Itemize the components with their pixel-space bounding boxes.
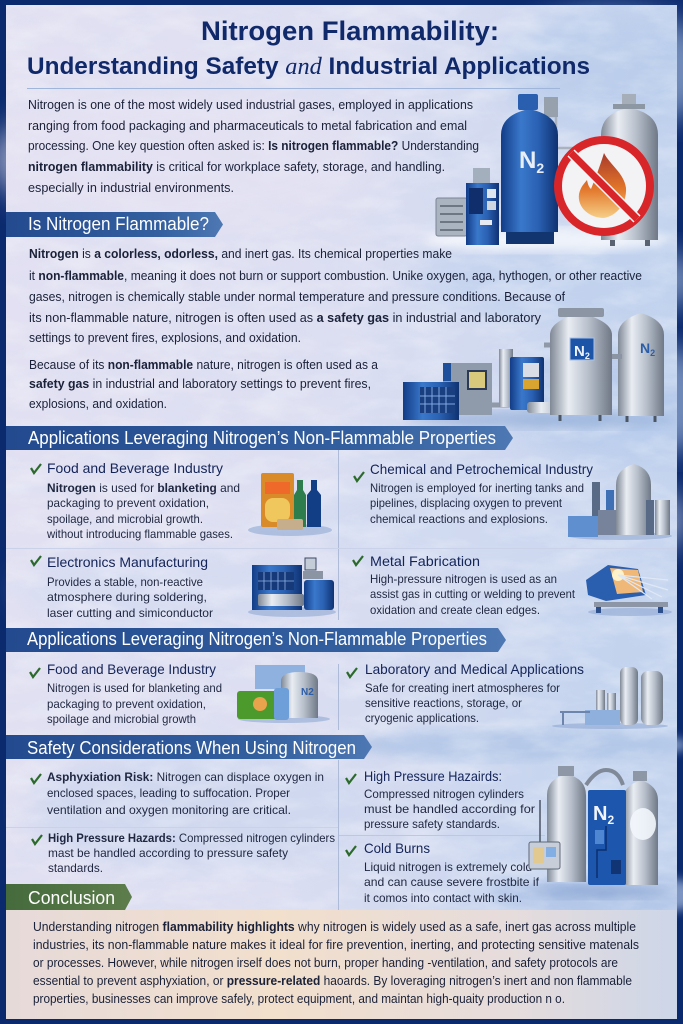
panel: conclusion: or processes. However, while nitrogen irself does not burn, proper handing -ventilation, and safety protocols are <box>33 956 618 970</box>
illustration: nitrogen storage unit <box>529 766 670 899</box>
item: high pressure hazards right: pressure safety standards. <box>364 817 500 831</box>
blue unit <box>510 357 544 410</box>
card: chemical and petrochemical: chemical reactions and explosions. <box>370 512 548 526</box>
panel: second application cards <box>30 661 668 730</box>
blue cabinet: 2 <box>607 813 614 827</box>
text block: flammability explanation: Nitrogen is a colorless, odorless, and inert gas. Its chemical properties make <box>29 247 452 261</box>
panel: conclusion: industries, its non-flammable nature makes it ideal for fire prevention, inerting, and protecting sensitive matenals <box>33 938 639 952</box>
grey cabinet <box>443 363 492 415</box>
intro paragraph <box>28 98 479 195</box>
icon: containers: N2 <box>301 687 314 698</box>
illustration: nitrogen generator plant <box>403 308 675 429</box>
right tank: N <box>640 340 650 356</box>
left tank <box>547 766 586 882</box>
intro paragraph: nitrogen flammability is critical for workplace safety, storage, and handling. <box>28 160 445 174</box>
large tank: N <box>574 343 585 360</box>
card: food and beverage <box>31 460 332 541</box>
item: cold burns: it comos into contact with skin. <box>364 891 522 905</box>
card: laboratory and medical: sensitive reactions, storage, or <box>365 696 522 710</box>
card: chemical and petrochemical: Nitrogen is employed for inerting tanks and <box>370 481 584 495</box>
card: food and beverage two: Food and Beverage Industry <box>47 661 216 677</box>
intro paragraph: processing. One key question often asked is: Is nitrogen flammable? Understanding <box>28 139 479 153</box>
control box <box>529 842 560 869</box>
item: cold burns: and can cause severe frostbite if <box>364 875 540 889</box>
card: food and beverage: Nitrogen is used for blanketing and <box>47 481 240 495</box>
item: high pressure hazards right: must be handled according for <box>364 802 535 816</box>
card: food and beverage two: spoilage and microbial growth <box>47 712 196 726</box>
item: high pressure hazards right: Compressed nitrogen cylinders <box>364 787 524 801</box>
section bar: conclusion: Conclusion <box>28 888 115 908</box>
silver tank <box>601 94 658 246</box>
text block: flammability explanation: it non-flammable, meaning it does not burn or support combustion. Unike oxygen, aga, hythogen, or other reactive <box>29 269 642 283</box>
right tank <box>623 771 658 885</box>
blue cabinet <box>588 790 626 885</box>
card: food and beverage two: packaging to prevent oxidation, <box>47 697 206 711</box>
frost patch <box>630 808 656 840</box>
intro paragraph: especially in industrial environments. <box>28 181 234 195</box>
item: asphyxiation risk <box>31 770 324 817</box>
icon: electronics machine <box>248 558 336 617</box>
card: laboratory and medical: Safe for creating inert atmospheres for <box>365 681 560 695</box>
title: Nitrogen Flammability: <box>201 16 499 46</box>
blue cabinet: N <box>593 803 607 825</box>
top pipes <box>586 770 623 785</box>
item: cold burns: Cold Burns <box>364 840 430 856</box>
item: asphyxiation risk: Asphyxiation Risk: Nitrogen can displace oxygen in <box>47 770 324 784</box>
item: high pressure hazards right <box>346 768 535 831</box>
section bar: conclusion <box>6 884 132 910</box>
illustration: nitrogen cylinders with no-fire sign <box>425 94 665 252</box>
card: electronics manufacturing: Electronics Manufacturing <box>47 554 208 570</box>
panel: safety items <box>6 760 545 910</box>
item: high pressure hazards left: mast be handled according to pressure safety <box>48 846 288 860</box>
grey rack <box>436 198 467 236</box>
large tank <box>550 308 612 421</box>
panel: conclusion <box>6 910 677 1019</box>
panel: conclusion: Understanding nitrogen flammability highlights why nitrogen is widely used as a safe, inert gas across multiple <box>33 920 636 934</box>
right tank <box>612 313 664 422</box>
small tank <box>499 349 513 407</box>
icon: laser cutter <box>586 565 672 616</box>
text block: flammability explanation: its non-flammable nature, nitrogen is often used as a safety gas in industrial and laboratory <box>29 311 542 325</box>
item: asphyxiation risk: ventilation and oxygen monitoring are critical. <box>47 803 291 817</box>
card: laboratory and medical: Laboratory and Medical Applications <box>365 661 584 677</box>
item: high pressure hazards left: High Pressure Hazards: Compressed nitrogen cylinders <box>48 831 335 845</box>
text block: flammability explanation: explosions, and oxidation. <box>29 397 167 411</box>
card: metal fabrication: assist gas in cutting or welding to prevent <box>370 587 576 601</box>
text block: flammability explanation: Because of its non-flammable nature, nitrogen is often used as a <box>29 358 378 372</box>
icon: refinery <box>568 464 672 540</box>
panel: conclusion: properties, businesses can improve safely, protect equipment, and maintan high-quaity production n o. <box>33 992 565 1006</box>
blue cylinder <box>501 94 558 244</box>
item: high pressure hazards right: High Pressure Hazairds: <box>364 768 502 784</box>
text block: flammability explanation: gases, nitrogen is chemically stable under normal temperature and pressure conditions. Because of <box>29 290 566 304</box>
text block: flammability explanation: settings to prevent fires, explosions, and oxidation. <box>29 331 301 345</box>
section bar: Is Nitrogen Flammable?: Is Nitrogen Flammable? <box>28 214 209 234</box>
card: metal fabrication: Metal Fabrication <box>370 553 480 569</box>
title <box>27 16 590 80</box>
card: food and beverage: packaging to prevent oxidation, <box>47 496 209 510</box>
item: high pressure hazards left <box>32 831 335 875</box>
card: food and beverage: Food and Beverage Industry <box>47 460 223 476</box>
right tank: 2 <box>650 348 655 358</box>
section bar: safety considerations: Safety Considerations When Using Nitrogen <box>27 738 356 758</box>
card: metal fabrication: High-pressure nitrogen is used as an <box>370 572 557 586</box>
card: chemical and petrochemical <box>354 461 672 540</box>
card: electronics manufacturing: laser cutting and simiconductor <box>47 606 213 620</box>
card: food and beverage: without introducing flammable gases. <box>46 527 233 541</box>
card: electronics manufacturing: Provides a stable, non-reactive <box>47 575 203 589</box>
item: asphyxiation risk: enclosed spaces, leading to suffocation. Proper <box>47 786 290 800</box>
large tank: 2 <box>585 351 590 361</box>
card: food and beverage two <box>30 661 330 726</box>
section bar: applications: Applications Leveraging Nitrogen’s Non-Flammable Properties <box>28 428 496 448</box>
no-fire sign <box>557 139 651 233</box>
item: cold burns: Liquid nitrogen is extremely cold <box>364 860 532 874</box>
card: laboratory and medical <box>347 661 668 729</box>
text block: flammability explanation <box>29 247 642 411</box>
item: cold burns <box>346 840 540 905</box>
title: Understanding Safety and Industrial Applications <box>27 53 590 80</box>
card: chemical and petrochemical: Chemical and Petrochemical Industry <box>370 461 593 477</box>
item: high pressure hazards left: standards. <box>48 861 103 875</box>
card: chemical and petrochemical: pipelines, displacing oxygen to prevent <box>370 496 563 510</box>
card: food and beverage: spoilage, and microbial growth. <box>47 512 203 526</box>
blue control unit <box>466 168 499 245</box>
panel: conclusion: essential to prevent asphyxiation, or pressure-related haoards. By loveraging nitrogen’s inert and non flammable <box>33 974 632 988</box>
section bar: applications (second): Applications Leveraging Nitrogen’s Non-Flammable Properties <box>27 629 487 649</box>
card: electronics manufacturing: atmosphere during soldering, <box>47 590 207 604</box>
silver pipe end <box>527 402 574 413</box>
card: laboratory and medical: cryogenic applications. <box>365 711 479 725</box>
card: food and beverage two: Nitrogen is used for blanketing and <box>47 681 222 695</box>
pipework <box>492 345 560 405</box>
card: metal fabrication: oxidation and create clean edges. <box>370 603 540 617</box>
icon: food bag and bottles <box>248 473 332 536</box>
blue cylinder: N <box>519 147 536 174</box>
intro paragraph: Nitrogen is one of the most widely used industrial gases, employed in applications <box>28 98 473 112</box>
icon: lab plant <box>552 667 668 729</box>
intro paragraph: ranging from food packaging and pharmaceuticals to metal fabrication and emal <box>28 119 467 133</box>
blue compressor <box>403 382 459 420</box>
text block: flammability explanation: safety gas in industrial and laboratory settings to prevent fires, <box>29 377 371 391</box>
panel: application cards <box>6 450 677 620</box>
connecting pipe <box>548 116 601 158</box>
blue cylinder: 2 <box>536 160 544 176</box>
card: electronics manufacturing <box>31 554 336 620</box>
card: metal fabrication <box>353 553 672 617</box>
icon: containers <box>237 665 330 723</box>
